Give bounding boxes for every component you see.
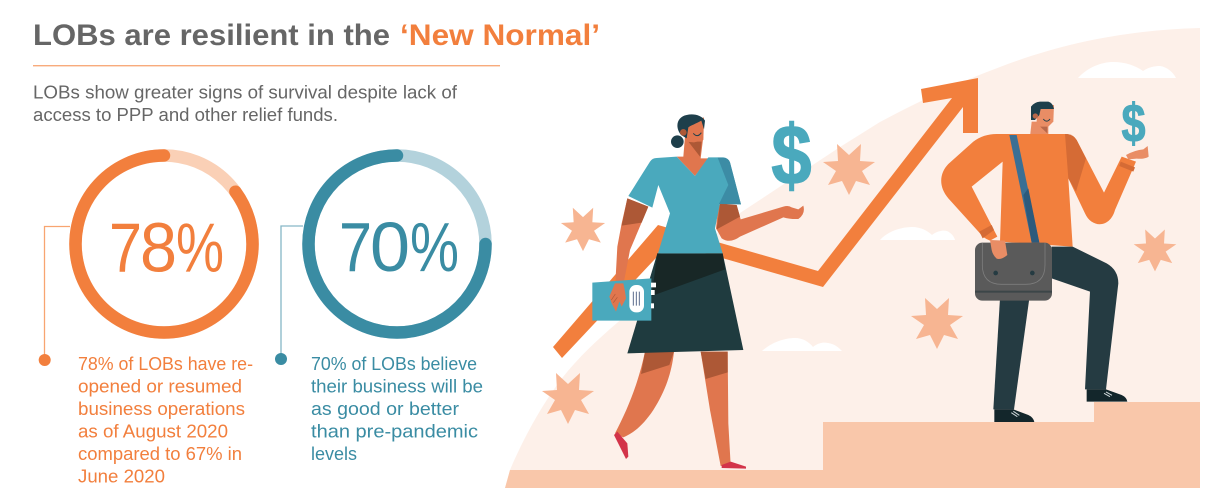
text block: 78% description: 78% of LOBs have re- <box>78 354 253 374</box>
bag strap <box>1009 135 1039 243</box>
title: ‘New Normal’ <box>400 19 600 52</box>
text block: 78% description: compared to 67% in <box>78 444 242 464</box>
trousers <box>993 247 1118 409</box>
sweater <box>941 134 1136 247</box>
illustration: woman <box>592 114 804 469</box>
text block: 70% description: levels <box>311 444 357 464</box>
messenger bag <box>975 243 1052 301</box>
text block: 70% description: 70% of LOBs believe <box>311 354 477 374</box>
text block: 70% description: as good or better <box>311 399 459 419</box>
icon: large dollar sign: $ <box>771 108 812 202</box>
left arm <box>615 198 648 285</box>
arrow: rising trend <box>553 78 978 358</box>
donut chart: 70%: 0 <box>370 208 410 286</box>
donut chart: 78%: 7 <box>109 208 142 286</box>
text block: 70% description: than pre-pandemic <box>311 422 478 442</box>
title <box>33 19 600 52</box>
back leg <box>614 352 674 459</box>
neck <box>677 137 708 176</box>
right hand <box>1126 146 1149 159</box>
hand <box>609 283 626 312</box>
donut chart: 70%: 7 <box>339 208 372 286</box>
text block: 78% description <box>78 354 253 486</box>
skirt <box>627 253 743 353</box>
left hand <box>990 240 1007 259</box>
text block: 70% description <box>311 354 483 464</box>
donut chart: 78% <box>76 156 253 332</box>
text block: 78% description: business operations <box>78 399 245 419</box>
head <box>1031 102 1054 127</box>
star bursts <box>542 144 1176 424</box>
clipboard <box>592 278 656 321</box>
text block: 78% description: opened or resumed <box>78 376 242 396</box>
text block: 70% description: their business will be <box>311 376 483 396</box>
connector: 78% <box>39 226 70 366</box>
intro text <box>33 82 458 125</box>
neck <box>1030 122 1048 137</box>
donut chart: 70%: % <box>410 208 459 286</box>
text block: 78% description: June 2020 <box>78 466 165 486</box>
right arm <box>716 203 804 241</box>
intro text: access to PPP and other relief funds. <box>33 105 338 125</box>
donut chart: 70% <box>308 156 486 332</box>
illustration background <box>505 28 1200 488</box>
donut chart: 78%: % <box>176 208 224 286</box>
shoes <box>994 389 1127 422</box>
front leg <box>701 352 746 469</box>
donut chart: 78%: 8 <box>140 208 177 286</box>
blouse <box>628 157 741 253</box>
icon: small dollar sign: $ <box>1121 94 1146 154</box>
intro text: LOBs show greater signs of survival despite lack of <box>33 82 458 102</box>
connector: 70% <box>275 226 303 365</box>
illustration: man <box>941 102 1149 422</box>
title: LOBs are resilient in the <box>33 19 390 52</box>
head <box>671 114 705 148</box>
text block: 78% description: as of August 2020 <box>78 422 228 442</box>
